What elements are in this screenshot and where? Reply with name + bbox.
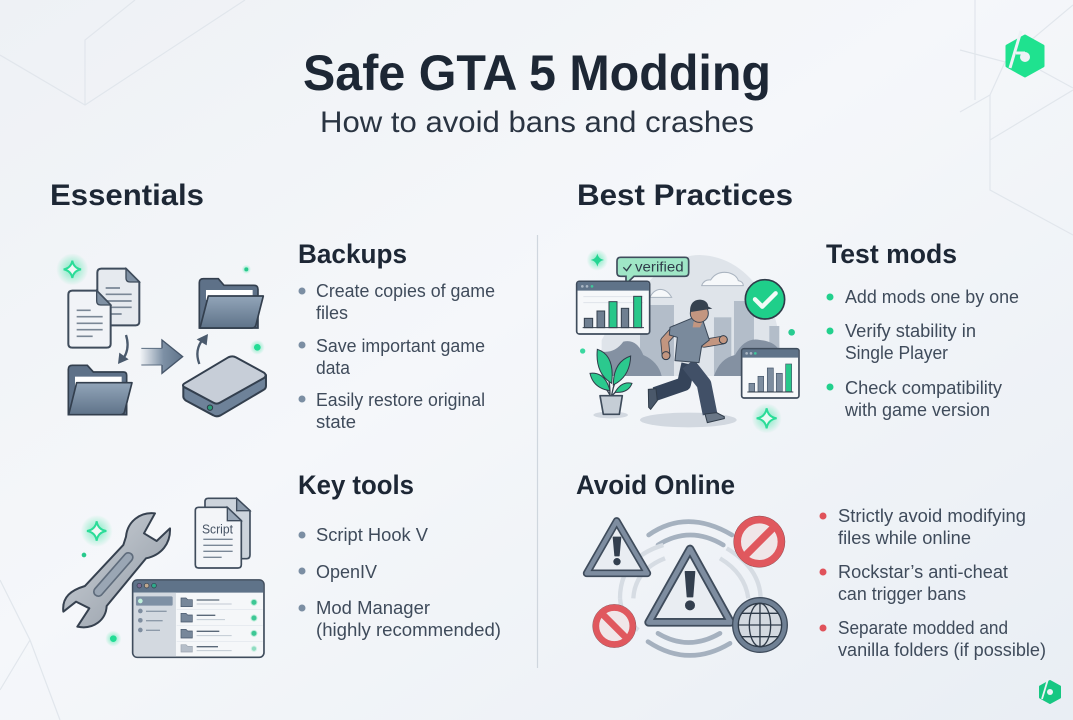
icon: backups illustration [56, 253, 266, 416]
text: backups bullets: state [316, 412, 356, 432]
text: key tools bullets: (highly recommended) [316, 620, 501, 640]
text: key tools bullets: Mod Manager [316, 598, 430, 618]
column divider [536, 235, 538, 668]
text: test mods bullets: Add mods one by one [845, 287, 1019, 307]
text: avoid online bullets: Rockstar’s anti-cheat [838, 562, 1008, 582]
heading: Test mods: Test mods [826, 239, 957, 269]
title: Safe GTA 5 Modding [303, 45, 771, 101]
text: avoid online bullets [820, 506, 1046, 660]
heading: Avoid Online: Avoid Online [576, 470, 735, 500]
verified badge: verified [635, 259, 684, 275]
text: avoid online bullets: Separate modded and [838, 618, 1008, 638]
text: test mods bullets: Verify stability in [845, 321, 976, 341]
panel: key tools [63, 470, 501, 657]
panel: avoid online [576, 470, 1046, 660]
text: test mods bullets: Check compatibility [845, 378, 1002, 398]
text: avoid online bullets: files while online [838, 528, 971, 548]
runner [648, 300, 727, 423]
heading: Backups: Backups [298, 239, 407, 269]
heading: Essentials: Essentials [50, 179, 204, 212]
logo: top right hexagon [1007, 31, 1043, 76]
heading: Best Practices: Best Practices [577, 179, 793, 212]
panel: test mods [577, 239, 1019, 433]
icon: runner illustration [577, 249, 799, 433]
panel: backups [56, 239, 495, 432]
text: backups bullets: Easily restore original [316, 390, 485, 410]
text: avoid online bullets: Strictly avoid modifying [838, 506, 1026, 526]
text: key tools bullets: Script Hook V [316, 525, 428, 545]
icon: key tools illustration: Script [202, 522, 233, 536]
icon: warnings illustration [587, 516, 787, 655]
text: test mods bullets: Single Player [845, 343, 948, 363]
text: backups bullets: data [316, 358, 351, 378]
logo: bottom right hexagon [1040, 679, 1060, 703]
text: avoid online bullets: vanilla folders (if possible) [838, 640, 1046, 660]
heading: Key tools: Key tools [298, 470, 414, 500]
text: key tools bullets: OpenIV [316, 562, 377, 582]
text: test mods bullets: with game version [844, 400, 990, 420]
text: test mods bullets [826, 287, 1019, 420]
subtitle: How to avoid bans and crashes [320, 106, 754, 139]
text: backups bullets: Save important game [316, 336, 485, 356]
text: backups bullets [298, 281, 495, 432]
text: backups bullets: Create copies of game [316, 281, 495, 301]
text: avoid online bullets: can trigger bans [838, 584, 966, 604]
icon: key tools illustration [63, 498, 264, 657]
text: backups bullets: files [316, 303, 348, 323]
text: key tools bullets [298, 525, 501, 640]
verified badge [617, 257, 689, 284]
plant [590, 349, 632, 414]
